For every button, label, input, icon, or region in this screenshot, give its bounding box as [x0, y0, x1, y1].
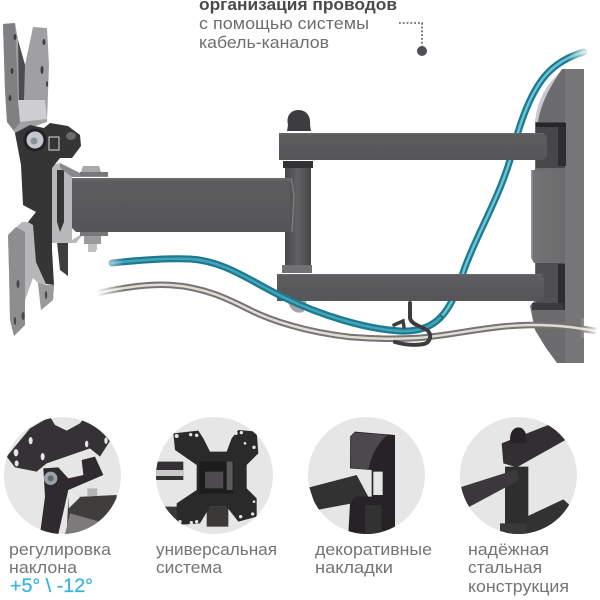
- teal cable, front run: [112, 259, 440, 331]
- product photo: TV wall mount: [3, 23, 600, 363]
- callout heading: cable management: [199, 0, 397, 52]
- callout description: [199, 14, 369, 52]
- cable hook: [394, 303, 430, 345]
- right wall plate: [530, 69, 584, 363]
- vertical pivot post with cap: [282, 110, 313, 313]
- VESA plate upper section: [3, 23, 49, 133]
- label: steel construction: конструкция: [468, 577, 569, 596]
- VESA plate lower section: [8, 222, 54, 336]
- feature 4: steel construction: [460, 417, 577, 596]
- label: decorative covers: декоративные: [315, 540, 432, 559]
- feature 1: tilt adjustment: [4, 417, 121, 597]
- feature 3: decorative covers: [308, 417, 432, 577]
- upper bolt: [80, 166, 108, 176]
- tilt range value: +5° \ -12°: [10, 576, 93, 597]
- thumbnail: VESA plate front: [156, 417, 273, 534]
- callout description: с помощью системы: [199, 14, 369, 33]
- cable end fades: [96, 40, 600, 338]
- label: universal system: система: [156, 558, 223, 577]
- label: tilt adjustment: регулировка: [9, 540, 112, 559]
- grey cable: [98, 285, 596, 339]
- lower bolt and nut: [80, 232, 108, 252]
- tilt bracket dark body: [15, 123, 81, 285]
- upper arm: [279, 133, 547, 160]
- weld seam: [291, 178, 294, 232]
- label: tilt adjustment: наклона: [9, 558, 78, 577]
- callout leader line with dot: [399, 23, 427, 56]
- label: steel construction: надёжная: [468, 540, 549, 559]
- thumbnail: tilt close-up: [4, 417, 121, 534]
- label: decorative covers: [315, 540, 432, 577]
- tilt adjustment bolt: [24, 128, 76, 152]
- feature 2: universal system: [156, 417, 277, 577]
- callout description: кабель-каналов: [199, 33, 329, 52]
- label: decorative covers: накладки: [315, 558, 393, 577]
- label: steel construction: стальная: [468, 558, 542, 577]
- main arm: [72, 178, 290, 232]
- tilt head silver bracket: [52, 163, 108, 276]
- thumbnail: steel arm joint: [460, 417, 577, 534]
- label: tilt adjustment: [9, 540, 112, 577]
- lower arm: [277, 274, 544, 301]
- label: universal system: универсальная: [156, 540, 277, 559]
- teal cable, rear run: [440, 52, 584, 318]
- label: universal system: [156, 540, 277, 577]
- thumbnail: decorative cover: [308, 417, 425, 534]
- label: steel construction: [468, 540, 569, 596]
